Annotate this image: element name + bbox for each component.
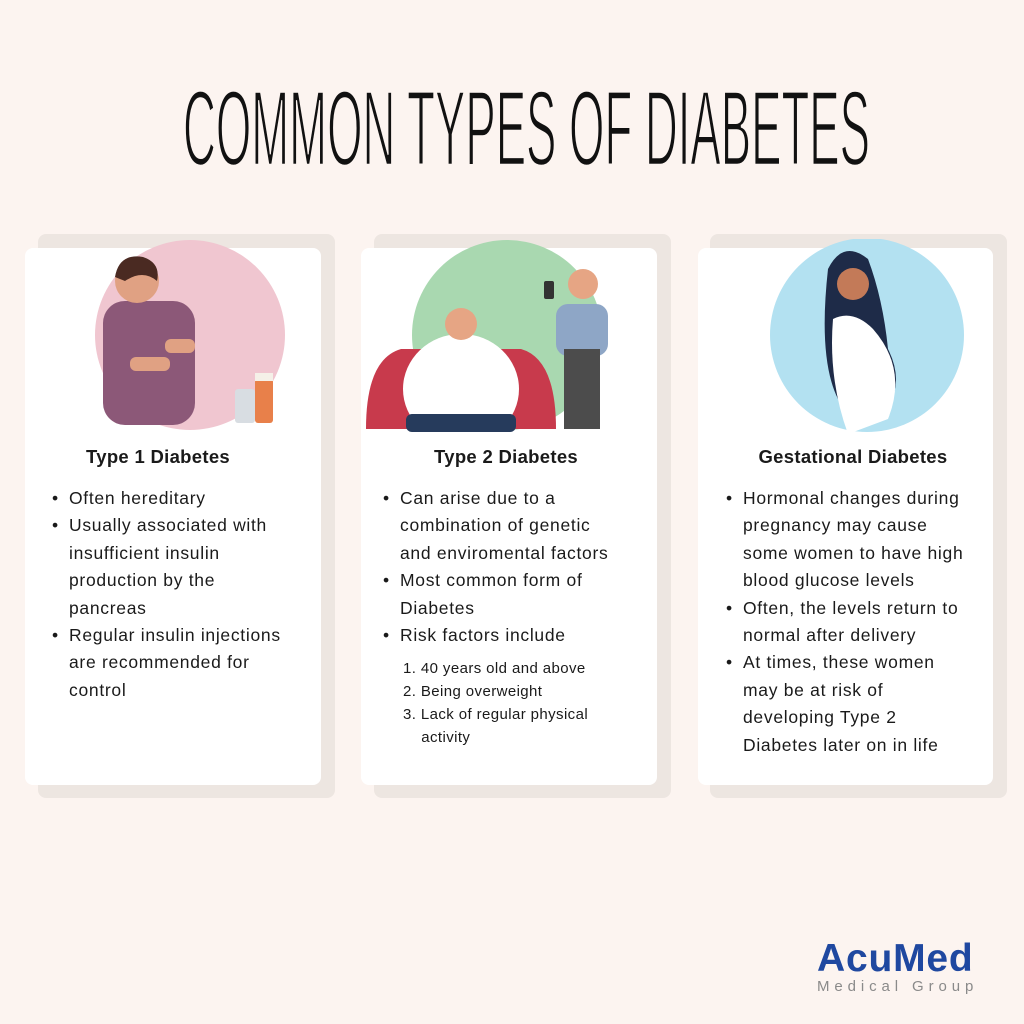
bullets: type 1: Often hereditary <box>69 488 206 508</box>
bullets: type 1: pancreas <box>69 598 147 618</box>
logo: AcuMed <box>817 937 973 980</box>
bullets: gestational: At times, these women <box>743 652 935 672</box>
panel: gestational <box>698 234 1007 798</box>
bullets: type 2: Most common form of <box>400 570 583 590</box>
logo: Medical Group <box>817 978 978 995</box>
heading: type 1: Type 1 Diabetes <box>86 446 230 467</box>
bullets: type 1: insufficient insulin <box>69 543 220 563</box>
bullets: gestational: blood glucose levels <box>743 570 915 590</box>
bullets: type 2: Risk factors include <box>400 625 566 645</box>
bullets: type 1 <box>52 488 281 700</box>
bullets: type 2: 2. Being overweight <box>403 683 542 700</box>
bullets: type 2 <box>384 488 608 746</box>
bullets: type 2: combination of genetic <box>400 515 591 535</box>
bullets: gestational: pregnancy may cause <box>743 515 928 535</box>
bullets: type 2: Can arise due to a <box>400 488 556 508</box>
bullets: type 1: control <box>69 680 126 700</box>
bullets: type 1: Regular insulin injections <box>69 625 281 645</box>
bullets: gestational: may be at risk of <box>743 680 883 700</box>
bullets: type 1: Usually associated with <box>69 515 267 535</box>
bullets: type 2: activity <box>421 729 470 746</box>
panel: type 2 <box>361 234 671 798</box>
bullets: gestational: Diabetes later on in life <box>743 735 939 755</box>
bullets: gestational <box>726 488 963 755</box>
bullets: type 2: 3. Lack of regular physical <box>403 706 588 723</box>
bullets: type 2: 1. 40 years old and above <box>403 660 586 677</box>
bullets: type 2: and enviromental factors <box>400 543 608 563</box>
bullets: type 1: production by the <box>69 570 215 590</box>
bullets: type 1: are recommended for <box>69 652 250 672</box>
icon: person with insulin pen <box>95 240 285 430</box>
bullets: gestational: Often, the levels return to <box>743 598 958 618</box>
bullets: gestational: developing Type 2 <box>743 707 897 727</box>
heading: type 2: Type 2 Diabetes <box>434 446 578 467</box>
icon: pregnant woman <box>770 239 964 432</box>
bullets: type 2: Diabetes <box>400 598 475 618</box>
icon: overweight man and older man <box>366 240 608 432</box>
bullets: gestational: Hormonal changes during <box>743 488 960 508</box>
panel: type 1 <box>25 234 335 798</box>
bullets: gestational: some women to have high <box>743 543 963 563</box>
bullets: gestational: normal after delivery <box>743 625 916 645</box>
heading: gestational: Gestational Diabetes <box>758 446 948 467</box>
